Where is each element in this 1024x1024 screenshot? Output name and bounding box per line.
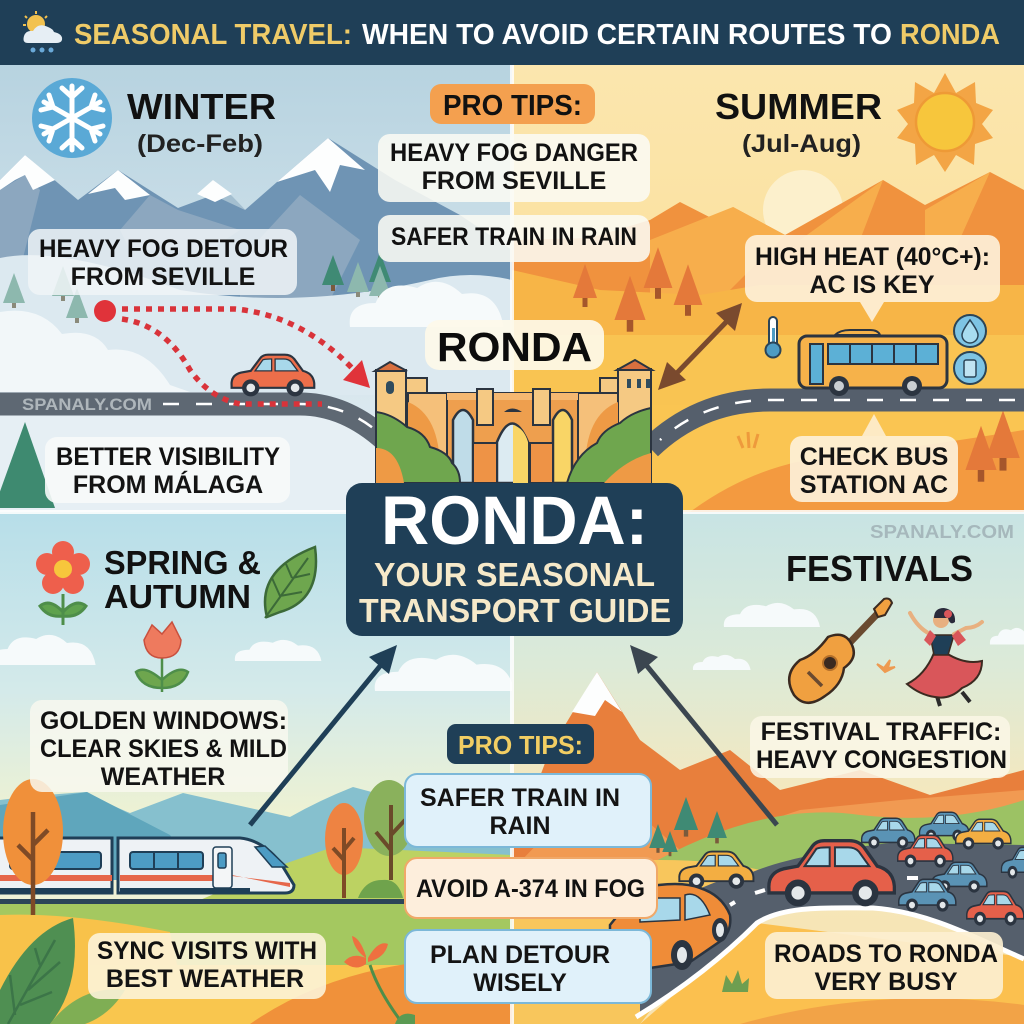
grass tuft — [722, 970, 749, 992]
rail track — [0, 899, 405, 904]
heading: winter: (Dec-Feb) — [137, 130, 263, 158]
bridge of Ronda — [375, 360, 652, 483]
tip: heavy fog danger: HEAVY FOG DANGER — [390, 139, 638, 167]
arrow: festivals to title — [630, 645, 777, 825]
icon: thermometer — [766, 317, 780, 358]
icon: flower — [36, 541, 90, 625]
callout: roads to Ronda: VERY BUSY — [814, 968, 958, 996]
label: ronda: RONDA — [437, 324, 592, 370]
callout: check bus — [790, 414, 958, 502]
bus — [799, 330, 947, 396]
callout: better visibility: FROM MÁLAGA — [73, 470, 263, 499]
summer mountains — [512, 172, 1024, 410]
callout: roads to Ronda — [765, 932, 1003, 999]
main title box: YOUR SEASONAL — [374, 556, 655, 593]
summer small trees — [738, 410, 1020, 482]
arrow: spring to title — [250, 645, 397, 825]
festival pines — [649, 797, 727, 856]
road: winter side — [0, 404, 385, 440]
callout: check bus: STATION AC — [800, 471, 948, 499]
title bar: WHEN TO AVOID CERTAIN ROUTES TO — [362, 19, 892, 51]
festival mountains — [512, 672, 1024, 1024]
arrow: summer to Ronda — [658, 303, 742, 390]
heading: winter: WINTER — [127, 86, 276, 127]
winter mountains — [0, 138, 512, 395]
main title box: RONDA: — [381, 482, 648, 559]
orange car foreground — [610, 884, 730, 970]
tip: plan detour — [405, 930, 651, 1003]
pro tips bottom: PRO TIPS: — [458, 730, 583, 760]
pro tips bottom — [447, 724, 594, 764]
tip: safer train — [405, 774, 651, 847]
callout: high heat: HIGH HEAT (40°C+): — [755, 243, 990, 271]
winter pine trees — [3, 252, 391, 323]
watermark left: SPANALY.COM — [22, 395, 152, 414]
traffic cars — [679, 812, 1024, 926]
festival clouds — [693, 603, 1024, 670]
callout: festival traffic: HEAVY CONGESTION — [756, 746, 1007, 774]
panel: summer — [512, 65, 1024, 512]
callout: high heat: AC IS KEY — [809, 271, 935, 299]
foreground leaves — [0, 918, 125, 1024]
panel: festivals — [512, 512, 1024, 1024]
icon: guitar — [789, 598, 892, 703]
bridge span — [408, 389, 618, 483]
festival road — [636, 843, 1024, 1017]
tip: safer train in rain: SAFER TRAIN IN RAIN — [391, 223, 637, 251]
callout: golden windows: CLEAR SKIES & MILD — [40, 735, 287, 763]
bridge towers — [375, 360, 652, 425]
spring clouds — [0, 635, 514, 691]
bridge cliffs — [376, 408, 651, 483]
icon: sun cloud rain — [23, 11, 62, 52]
callout: heavy fog detour — [28, 229, 297, 295]
heading: summer: SUMMER — [715, 86, 882, 127]
callout: heavy fog detour: FROM SEVILLE — [71, 263, 255, 291]
icon: sun — [897, 73, 993, 172]
heading: winter — [127, 86, 276, 158]
train — [0, 838, 294, 894]
main title box: TRANSPORT GUIDE — [359, 592, 671, 629]
icon: water drop — [954, 315, 986, 347]
heading: festivals: FESTIVALS — [786, 548, 973, 589]
callout: better visibility — [45, 437, 290, 503]
heading: spring and autumn — [104, 544, 261, 615]
tip: safer train: SAFER TRAIN IN — [420, 784, 620, 812]
heading: summer — [715, 86, 882, 158]
heading: summer: (Jul-Aug) — [742, 130, 861, 158]
callout: heavy fog detour: HEAVY FOG DETOUR — [39, 235, 288, 263]
pro tips top: PRO TIPS: — [443, 90, 582, 122]
title text: SEASONAL TRAVEL: — [74, 19, 352, 51]
callout: sync visits — [88, 933, 326, 999]
road markings — [163, 400, 1015, 440]
tip: plan detour: WISELY — [473, 969, 567, 997]
road: summer side — [650, 400, 1024, 448]
tip: safer train in rain — [378, 215, 650, 262]
summer trees — [573, 247, 702, 332]
foreground flowers — [344, 936, 415, 1024]
tip: safer train: RAIN — [489, 812, 551, 840]
icon: flamenco dancer — [907, 608, 982, 706]
callout: golden windows — [30, 700, 288, 792]
heading: spring and autumn: AUTUMN — [104, 578, 251, 615]
main title box — [346, 482, 683, 636]
callout: festival traffic: FESTIVAL TRAFFIC: — [761, 718, 1001, 746]
callout: better visibility: BETTER VISIBILITY — [56, 443, 280, 471]
icon: snowflake — [32, 78, 112, 158]
tip: plan detour: PLAN DETOUR — [430, 941, 610, 969]
tip: avoid A-374 — [405, 858, 657, 918]
callout: check bus: CHECK BUS — [800, 443, 948, 471]
icon: tulip — [136, 622, 188, 692]
winter clouds — [0, 282, 504, 512]
title bar: RONDA — [900, 19, 1000, 51]
callout: golden windows: GOLDEN WINDOWS: — [40, 707, 287, 735]
summer pale sun — [763, 170, 843, 250]
heading: spring and autumn: SPRING & — [104, 544, 261, 581]
winter pine large — [0, 422, 55, 508]
callout: roads to Ronda: ROADS TO RONDA — [774, 940, 998, 968]
callout: high heat — [745, 235, 1000, 322]
spring hills — [0, 787, 512, 1024]
tip: heavy fog danger — [378, 134, 650, 202]
callout: festival traffic — [750, 716, 1010, 778]
red dashed detour route — [94, 300, 370, 404]
music accent — [877, 660, 895, 672]
icon: water bottle — [954, 352, 986, 384]
tip: heavy fog danger: FROM SEVILLE — [422, 167, 606, 195]
callout: golden windows: WEATHER — [101, 763, 225, 791]
tip: avoid A-374: AVOID A-374 IN FOG — [416, 875, 645, 903]
autumn trees — [3, 779, 414, 915]
car: winter — [232, 355, 314, 396]
callout: sync visits: BEST WEATHER — [106, 965, 304, 993]
icon: leaf — [265, 547, 316, 618]
panel: winter — [0, 65, 512, 512]
panel: spring and autumn — [0, 512, 514, 1024]
watermark right: SPANALY.COM — [870, 522, 1014, 542]
summer ground — [650, 405, 1024, 512]
callout: sync visits: SYNC VISITS WITH — [97, 937, 317, 965]
title bar — [0, 0, 1024, 65]
